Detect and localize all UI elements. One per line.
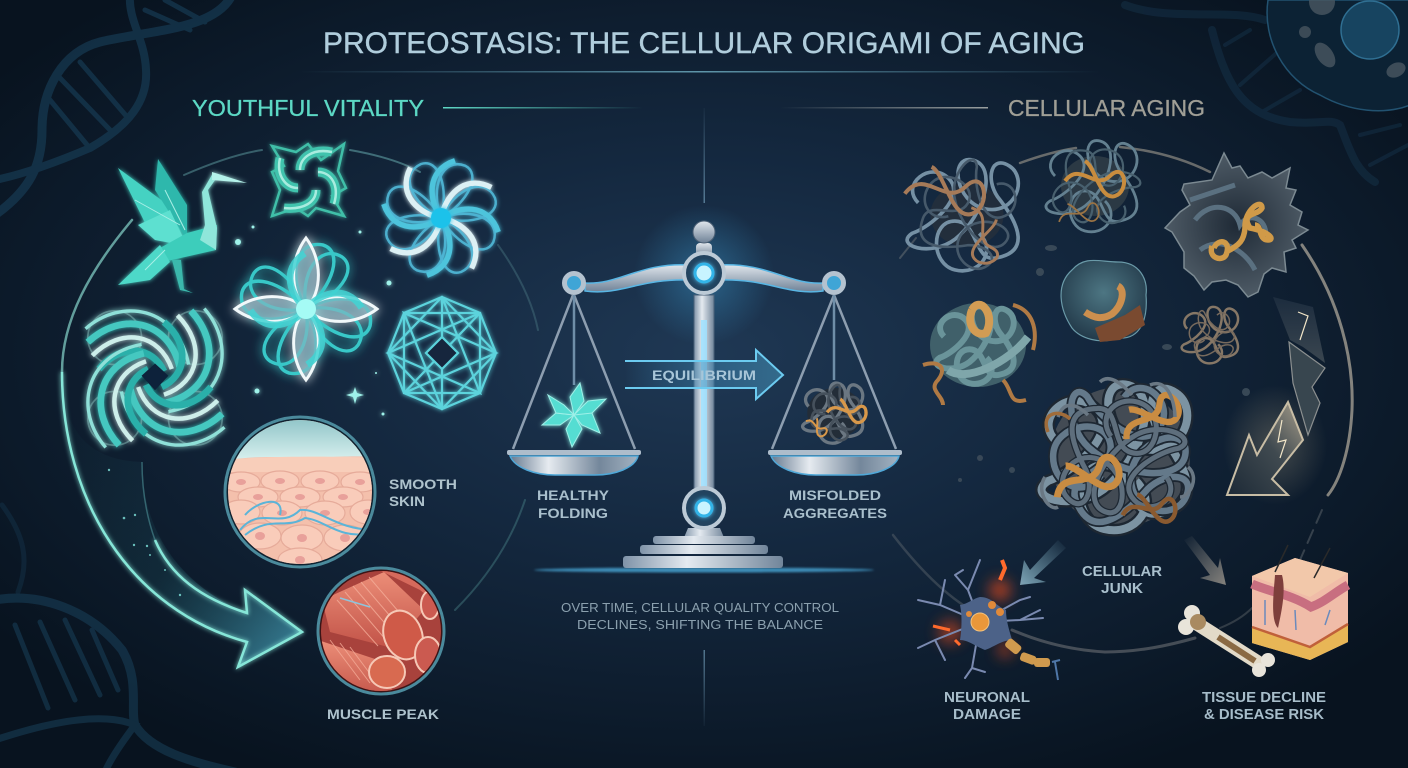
decoration: DNA helix top right <box>1125 5 1408 182</box>
panel: cellular aging <box>893 137 1352 723</box>
arrow: time flows to muscle <box>62 372 302 667</box>
icon: folded pinwheel <box>272 144 346 216</box>
label: smooth skin: SMOOTH <box>389 477 457 492</box>
arrow: equilibrium: EQUILIBRIUM <box>652 368 756 383</box>
arc: youth cycle <box>62 150 538 610</box>
tangle: small thin strand <box>1182 307 1238 363</box>
icon: ribbon knot <box>86 309 224 447</box>
icon: damaged neuron <box>918 560 1060 680</box>
scale column <box>693 221 715 500</box>
arrow: junk to tissue <box>1184 536 1226 585</box>
label: tissue decline: TISSUE DECLINE <box>1202 690 1326 706</box>
icon: origami crane <box>118 159 247 293</box>
label: cellular junk: CELLULAR <box>1082 564 1163 580</box>
label: healthy folding: HEALTHY <box>537 487 610 503</box>
heading: cellular aging: CELLULAR AGING <box>1008 95 1205 121</box>
debris <box>958 245 1250 482</box>
label: neuronal damage: DAMAGE <box>953 707 1021 723</box>
icon: bone <box>1178 605 1275 677</box>
icon: swirl <box>380 157 502 279</box>
glow halo <box>634 205 774 345</box>
arrow: cracked decline <box>1223 297 1327 505</box>
label: misfolded aggregates: MISFOLDED <box>789 487 881 503</box>
icon: skin circle <box>222 417 386 572</box>
icon: geometric mesh <box>388 297 496 409</box>
heading: youthful vitality: YOUTHFUL VITALITY <box>192 95 424 121</box>
label: cellular junk: JUNK <box>1101 581 1144 597</box>
label: healthy folding: FOLDING <box>538 505 608 521</box>
decoration: cell top right <box>1267 0 1408 111</box>
left pan <box>507 295 641 475</box>
sparkles <box>235 226 392 416</box>
icon: muscle circle <box>318 568 445 700</box>
label: tissue decline: & DISEASE RISK <box>1204 707 1325 723</box>
arrow: junk to neuron <box>1020 540 1066 585</box>
title: PROTEOSTASIS: THE CELLULAR ORIGAMI OF AGING <box>323 27 1085 60</box>
panel: balance scale <box>507 205 902 632</box>
scale hub top <box>684 253 724 293</box>
scale hub bottom and base <box>623 488 783 568</box>
aggregate: spiky rock <box>1165 153 1308 297</box>
icon: misfolded tangle on pan <box>803 378 869 444</box>
decoration: DNA helix bottom left <box>0 505 235 768</box>
tangle: upper protein <box>1046 137 1147 237</box>
aggregate: smooth blob <box>1061 260 1146 342</box>
arrow: equilibrium <box>625 350 783 399</box>
tangle: loose protein <box>904 147 1033 276</box>
label: neuronal damage: NEURONAL <box>944 690 1030 706</box>
decoration: DNA helix top left <box>0 0 232 215</box>
caption: over time: DECLINES, SHIFTING THE BALANCE <box>577 618 823 632</box>
icon: skin cube <box>1252 545 1348 660</box>
label: smooth skin: SKIN <box>389 494 425 509</box>
arc: aging cycle <box>893 147 1352 652</box>
scale beam <box>564 265 844 292</box>
icon: central flower <box>234 237 378 381</box>
aggregate: big cellular junk <box>1042 376 1195 530</box>
tangle: left mid aggregate <box>923 303 1035 405</box>
icon: healthy fold pinwheel <box>542 383 606 447</box>
base glow line <box>534 568 874 572</box>
caption: over time: OVER TIME, CELLULAR QUALITY CONTROL <box>561 601 839 615</box>
label: misfolded aggregates: AGGREGATES <box>783 505 887 521</box>
panel: youthful vitality <box>62 144 538 722</box>
centre dividers <box>704 108 705 726</box>
right pan <box>768 295 902 475</box>
label: muscle peak: MUSCLE PEAK <box>327 707 439 722</box>
